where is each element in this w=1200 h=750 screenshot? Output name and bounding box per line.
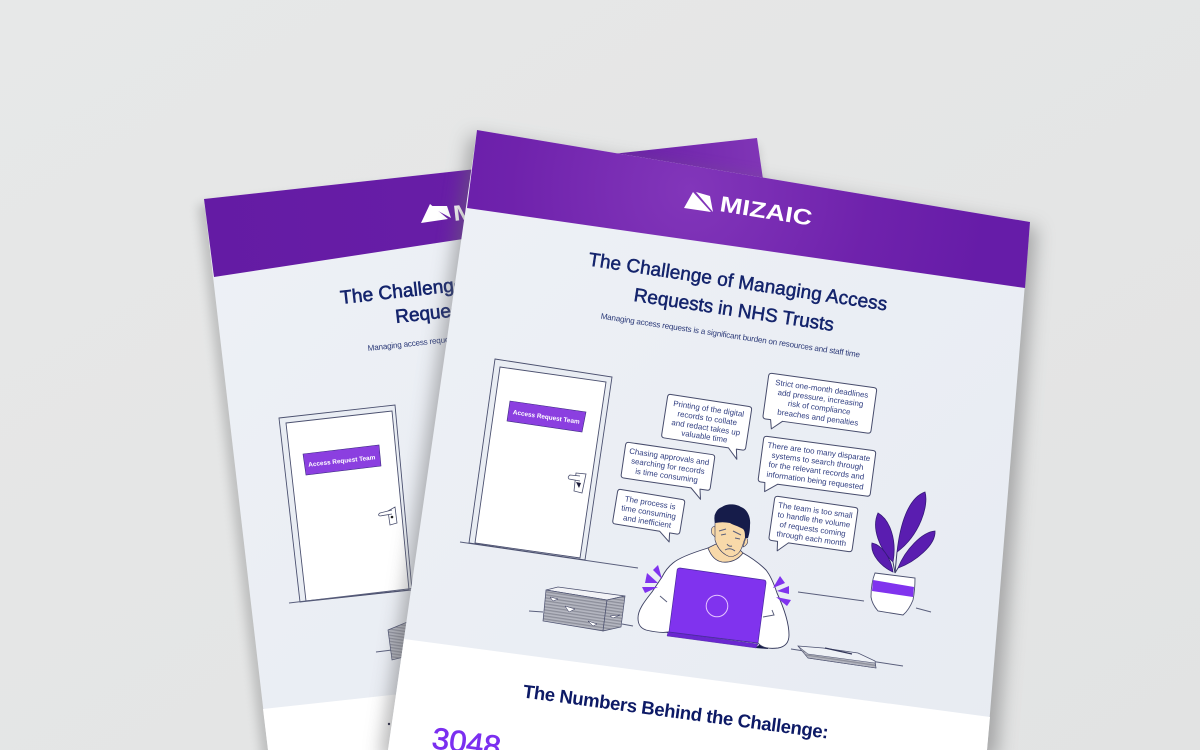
panel: front page — [380, 130, 1037, 750]
leaves — [872, 492, 935, 572]
speech bubble: strict deadlines: Strict one-month deadlines — [775, 378, 869, 400]
door sign — [507, 401, 586, 432]
front page white lower section — [388, 639, 990, 750]
door sign: Access Request Team — [512, 409, 580, 426]
notebook and pen — [791, 646, 903, 668]
back page logo: MIZAIC — [452, 191, 546, 226]
speech bubble: strict deadlines: breaches and penalties — [777, 408, 859, 428]
speech bubble: disparate systems: There are too many disparate — [767, 441, 871, 463]
speech bubble: process: The process is — [624, 494, 676, 511]
speech bubble: printing: Printing of the digital — [673, 399, 745, 419]
back page title: Requests in NHS Trusts — [394, 285, 597, 328]
speech bubble: disparate systems — [757, 436, 876, 505]
section heading: The Numbers Behind the Challenge: — [522, 681, 830, 743]
back page title: The Challenge of Managing Access — [339, 255, 642, 309]
ears — [711, 526, 748, 547]
speech bubble: process — [611, 489, 685, 543]
speech bubble: printing: records to collate — [677, 409, 738, 427]
back page book stack — [376, 620, 412, 660]
speech bubble: chasing: Chasing approvals and — [629, 447, 710, 467]
speech bubble: disparate systems: systems to search through — [771, 451, 864, 472]
back page door — [279, 405, 425, 603]
subtitle: Managing access requests is a significant burden on resources and staff time — [600, 312, 861, 359]
panel: back page — [198, 138, 830, 750]
back page logo — [421, 191, 546, 226]
plant — [871, 492, 935, 615]
speech bubble: small team — [767, 496, 858, 561]
arm creases — [660, 596, 774, 617]
laptop — [669, 568, 766, 643]
speech bubble: small team: through each month — [776, 529, 847, 548]
speech bubble: chasing — [619, 442, 715, 501]
stress marks — [642, 565, 791, 606]
speech bubble: process: and inefficient — [622, 513, 673, 530]
back page header band — [204, 138, 765, 277]
face — [715, 515, 747, 556]
speech bubble: small team: of requests coming — [779, 520, 846, 538]
speech bubble: printing: and redact takes up — [671, 418, 741, 438]
speech bubble: chasing: is time consuming — [635, 467, 698, 485]
neck and collar — [708, 544, 743, 562]
door handle — [568, 473, 586, 493]
title: Requests in NHS Trusts — [632, 285, 835, 336]
speech bubble: process: time consuming — [621, 503, 677, 521]
floor lines — [460, 542, 931, 612]
speech bubble: small team: The team is too small — [778, 501, 853, 520]
speech bubble: small team: to handle the volume — [777, 510, 852, 530]
back page white lower section — [263, 648, 830, 750]
pot — [871, 573, 915, 615]
torso and arms — [638, 548, 789, 648]
back page door: Access Request Team — [308, 454, 376, 469]
title: The Challenge of Managing Access — [587, 250, 889, 316]
door — [469, 359, 612, 560]
logo: Mizaic — [684, 191, 814, 231]
hair — [714, 504, 750, 538]
facial features — [719, 529, 741, 551]
speech bubble: strict deadlines — [761, 373, 877, 442]
person at laptop — [638, 504, 791, 649]
back page heading fragment — [388, 723, 390, 725]
stems — [893, 552, 898, 573]
front page header band — [467, 130, 1030, 288]
back page subtitle: Managing access requests is a significant burden on resources and staff time — [367, 315, 629, 353]
speech bubble: printing — [660, 394, 752, 460]
speech bubble: disparate systems: for the relevant records and — [768, 460, 865, 482]
speech bubble: disparate systems: information being requested — [766, 470, 864, 492]
book stack — [529, 587, 633, 631]
speech bubble: printing: valuable time — [681, 429, 729, 445]
dark cuffs — [660, 624, 768, 649]
logo: Mizaic: MIZAIC — [718, 191, 814, 231]
speech bubble: strict deadlines: risk of compliance — [787, 399, 852, 417]
speech bubble: strict deadlines: add pressure, increasing — [777, 388, 864, 409]
speech bubble: chasing: searching for records — [631, 457, 705, 476]
